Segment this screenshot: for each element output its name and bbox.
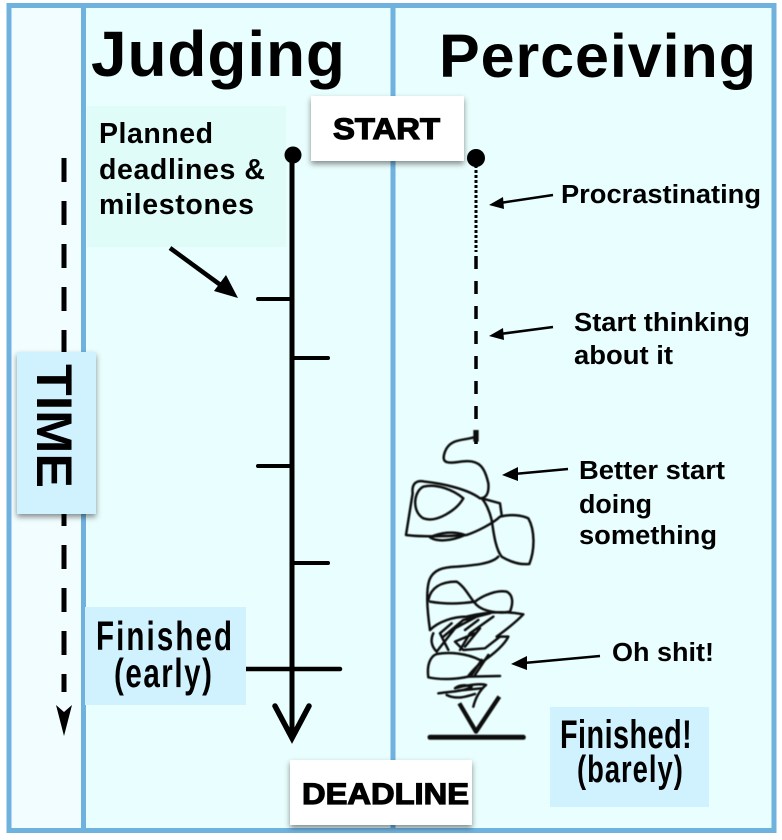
arrow: oh shit [511, 656, 600, 670]
label: Better start doing something: doing [579, 491, 652, 519]
label: Oh shit!: Oh shit! [612, 639, 714, 667]
perceiving start dot [467, 149, 485, 167]
scribble [406, 430, 533, 737]
callout: finished barely [550, 707, 709, 807]
label: Better start doing something: something [579, 522, 717, 550]
arrow: better start [502, 467, 568, 481]
label: START [311, 96, 464, 161]
arrow: to milestone [170, 248, 238, 298]
callout: planned deadlines and milestones: milestones [99, 189, 254, 221]
callout: planned deadlines and milestones [87, 106, 286, 247]
panel: perceiving column [393, 5, 774, 831]
label: TIME [17, 352, 96, 514]
callout: finished early [85, 607, 246, 705]
dotted procrastinating line [474, 165, 478, 252]
panel: time column [9, 5, 84, 831]
label: Better start doing something: Better start [579, 457, 726, 485]
panel: judging column [84, 5, 393, 831]
heading: Perceiving: Perceiving [439, 22, 756, 90]
label: Better start doing something [579, 457, 726, 550]
label: DEADLINE [290, 760, 472, 825]
judging timeline [246, 146, 340, 738]
callout: planned deadlines and milestones: Planned [99, 118, 213, 150]
time arrow [56, 158, 72, 736]
label: START: START [333, 113, 440, 146]
label: Start thinking about it: Start thinking [574, 309, 750, 337]
heading: Judging: Judging [91, 18, 345, 90]
label: Start thinking about it [574, 309, 750, 370]
label: Start thinking about it: about it [574, 342, 674, 370]
label: TIME: TIME [26, 364, 82, 488]
callout: planned deadlines and milestones: deadlines & [99, 154, 265, 186]
callout: finished barely: (barely) [577, 749, 683, 791]
callout: finished barely: Finished! [560, 712, 692, 757]
label: Procrastinating: Procrastinating [561, 181, 761, 209]
arrow: procrastinating [489, 195, 553, 209]
callout: finished early: Finished [96, 613, 232, 659]
arrow: start thinking [489, 327, 553, 340]
dashed thinking line [474, 256, 478, 446]
label: DEADLINE: DEADLINE [302, 778, 469, 811]
callout: finished early: (early) [114, 650, 212, 696]
